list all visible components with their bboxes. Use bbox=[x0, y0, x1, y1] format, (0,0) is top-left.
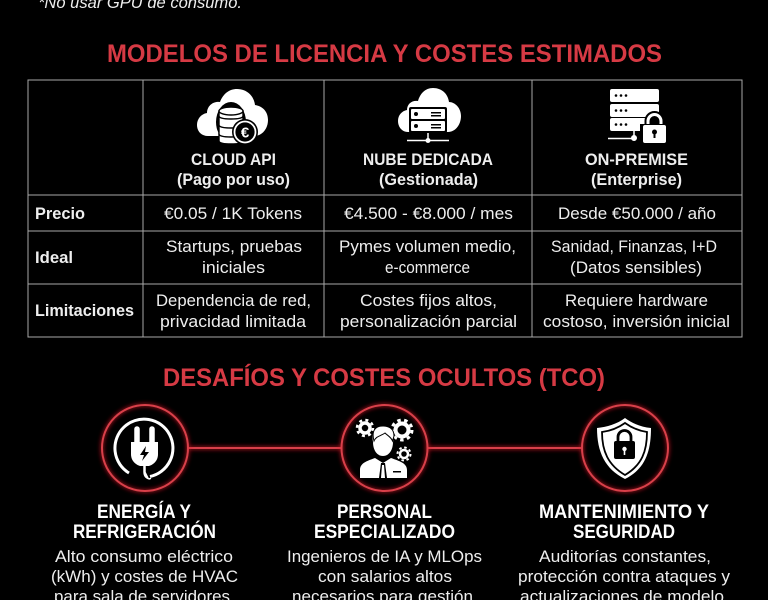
row: limitaciones: Requiere hardware bbox=[565, 291, 708, 310]
column heading: cloud api: CLOUD API bbox=[191, 150, 276, 169]
column: maintenance: MANTENIMIENTO Y bbox=[539, 502, 709, 523]
column: staff: Ingenieros de IA y MLOps bbox=[287, 547, 482, 566]
icon: energy plug in ring bbox=[102, 405, 188, 491]
column: staff: con salarios altos bbox=[318, 567, 452, 586]
icon: on-premise servers with padlock bbox=[608, 89, 668, 145]
heading: licence models: MODELOS DE LICENCIA Y COSTES ESTIMADOS bbox=[107, 40, 662, 68]
row: precio: Desde €50.000 / año bbox=[558, 204, 716, 223]
column heading: on-premise: ON-PREMISE bbox=[585, 150, 688, 169]
column: energy bbox=[51, 501, 238, 600]
column: energy: REFRIGERACIÓN bbox=[73, 521, 216, 543]
row: ideal: Startups, pruebas bbox=[166, 237, 302, 256]
icon: cloud with database and euro: € bbox=[241, 124, 250, 142]
heading: hidden costs: DESAFÍOS Y COSTES OCULTOS (TCO) bbox=[163, 363, 605, 392]
row: limitaciones: Limitaciones bbox=[35, 301, 134, 320]
column: staff: ESPECIALIZADO bbox=[314, 522, 455, 543]
column: maintenance: protección contra ataques y bbox=[518, 567, 730, 586]
row: ideal: Pymes volumen medio, bbox=[339, 237, 516, 256]
connector lines bbox=[188, 446, 582, 450]
row: limitaciones: Costes fijos altos, bbox=[360, 291, 497, 310]
column: maintenance bbox=[518, 502, 730, 600]
column heading: nube dedicada bbox=[363, 150, 493, 189]
column: maintenance: SEGURIDAD bbox=[573, 522, 675, 543]
column: energy: ENERGÍA Y bbox=[97, 501, 191, 523]
column heading: nube dedicada: NUBE DEDICADA bbox=[363, 150, 493, 169]
column: staff bbox=[287, 502, 482, 600]
row: ideal bbox=[35, 237, 717, 277]
table: licence models bbox=[28, 80, 742, 337]
icon: cloud with dedicated servers bbox=[398, 88, 461, 143]
row: ideal: e-commerce bbox=[385, 258, 470, 277]
row: limitaciones: personalización parcial bbox=[340, 312, 517, 331]
icon: cloud with database and euro bbox=[197, 89, 268, 146]
column heading: on-premise bbox=[585, 150, 688, 189]
column: energy: (kWh) y costes de HVAC bbox=[51, 567, 238, 586]
column heading: cloud api: (Pago por uso) bbox=[177, 170, 290, 189]
column: energy: Alto consumo eléctrico bbox=[55, 547, 233, 566]
row: ideal: Ideal bbox=[35, 248, 73, 267]
column heading: cloud api bbox=[177, 150, 290, 189]
icon: security shield in ring bbox=[582, 405, 668, 491]
column: staff: PERSONAL bbox=[337, 502, 432, 523]
column heading: on-premise: (Enterprise) bbox=[591, 170, 682, 189]
icon: specialised staff in ring bbox=[342, 405, 428, 491]
row: precio: Precio bbox=[35, 204, 85, 223]
row: limitaciones: Dependencia de red, bbox=[156, 291, 311, 310]
row: limitaciones: privacidad limitada bbox=[160, 312, 307, 331]
row: ideal: Sanidad, Finanzas, I+D bbox=[551, 237, 717, 256]
row: precio bbox=[35, 204, 716, 223]
row: ideal: (Datos sensibles) bbox=[570, 258, 702, 277]
column heading: nube dedicada: (Gestionada) bbox=[379, 170, 478, 189]
row: precio: €4.500 - €8.000 / mes bbox=[344, 204, 513, 223]
row: limitaciones bbox=[35, 291, 730, 331]
row: limitaciones: costoso, inversión inicial bbox=[543, 312, 730, 331]
column: maintenance: Auditorías constantes, bbox=[539, 547, 711, 566]
row: precio: €0.05 / 1K Tokens bbox=[164, 204, 302, 223]
row: ideal: iniciales bbox=[202, 258, 265, 277]
